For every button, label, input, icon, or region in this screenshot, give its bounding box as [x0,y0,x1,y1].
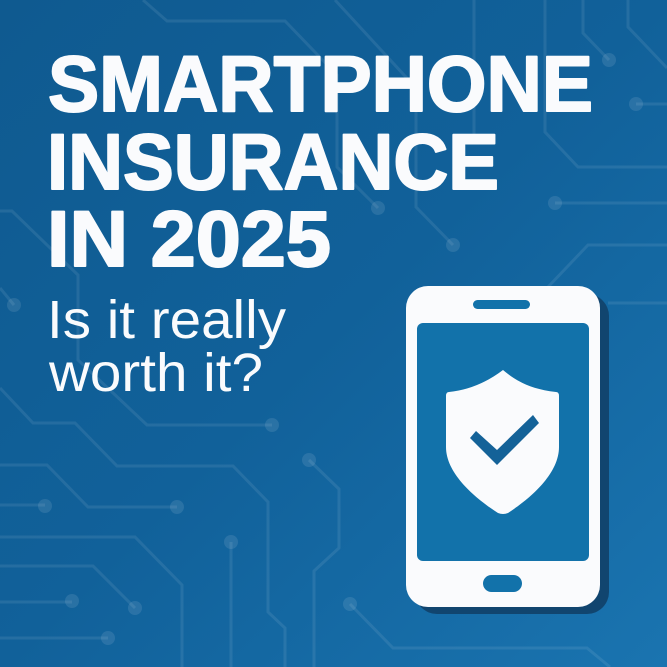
icon: smartphone with shield [406,286,609,614]
subtitle [47,290,286,403]
subtitle: Is it really [47,290,286,350]
home button [483,575,522,592]
title [47,39,593,283]
title: IN 2025 [47,194,331,283]
title: SMARTPHONE [48,39,593,128]
phone body [406,286,600,607]
icon: check mark [470,415,539,465]
screen [417,323,589,561]
subtitle: worth it? [48,343,263,403]
title: INSURANCE [47,117,499,206]
phone shadow [415,294,609,614]
icon: shield [446,370,559,514]
speaker [473,300,530,309]
